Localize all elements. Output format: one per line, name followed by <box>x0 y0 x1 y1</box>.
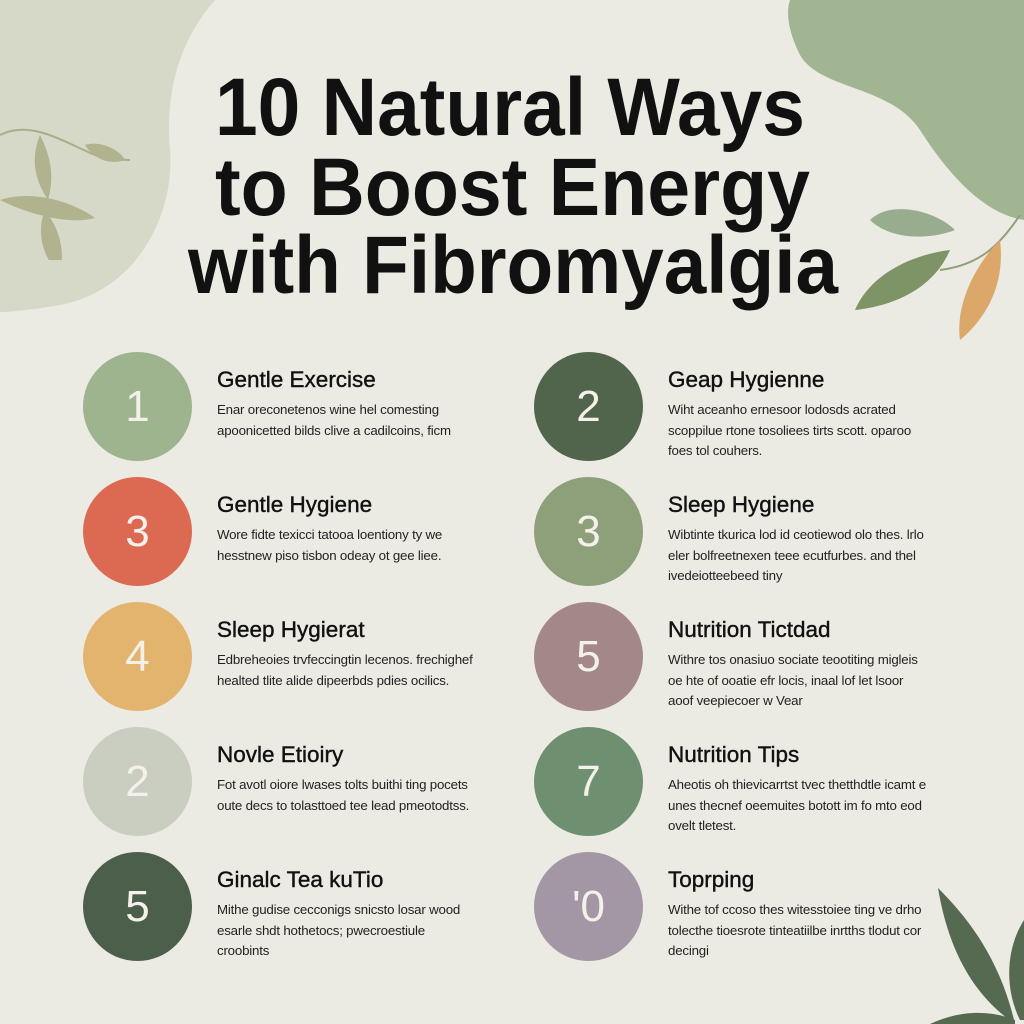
item 5 right: Nutrition Tictdad <box>668 617 831 642</box>
icon: top-left leaves <box>0 128 130 260</box>
item 2 <box>534 352 911 461</box>
item 5 left <box>83 852 460 961</box>
item 2: Wiht aceanho ernesoor lodosds acrated scoppilue rtone tosoliees tirts scott. oparoo foes tol couhers. <box>668 402 911 458</box>
item 2: Geap Hygienne <box>668 367 824 392</box>
item 10: Withe tof ccoso thes witesstoiee ting ve drho tolecthe tioesrote tinteatiilbe inrtths tlodut cor decingi <box>668 902 921 958</box>
title <box>187 62 839 311</box>
icon: bottom-right leaves <box>930 888 1024 1024</box>
item 5 left: 5 <box>125 882 150 930</box>
item 3 right: 3 <box>576 506 601 556</box>
item 3 left: 3 <box>125 506 150 556</box>
item 3 right <box>534 477 924 586</box>
item 10 <box>534 852 922 961</box>
item 2 left: Novle Etioiry <box>217 742 343 767</box>
item 5 right: 5 <box>576 632 601 680</box>
item 5 right: Withre tos onasiuo sociate teootiting migleis oe hte of ooatie efr locis, inaal lof let lsoor aoof veepiecoer w Vear <box>668 652 918 708</box>
item 3 left <box>83 477 442 586</box>
item 2 left <box>83 727 469 836</box>
item 3 right: Wibtinte tkurica lod id ceotiewod olo thes. lrlo eler bolfreetnexen teee ecutfurbes. and thel ivedeiotteebeed tiny <box>668 527 924 583</box>
icon: top-right leaves <box>855 209 1020 340</box>
title: with Fibromyalgia <box>187 220 839 311</box>
item 2 left: Fot avotl oiore lwases tolts buithi ting pocets oute decs to tolasttoed tee lead pmeotodtss. <box>217 777 469 812</box>
item 4 <box>83 602 473 711</box>
title: to Boost Energy <box>215 142 810 233</box>
item 7: Nutrition Tips <box>668 742 799 767</box>
item 10: Toprping <box>668 867 754 892</box>
item 3 left: Gentle Hygiene <box>217 492 372 517</box>
item 7: 7 <box>576 756 601 806</box>
item 3 right: Sleep Hygiene <box>668 492 814 517</box>
item 1: 1 <box>125 382 150 430</box>
item 10: '0 <box>572 882 605 930</box>
item 4: Sleep Hygierat <box>217 617 365 642</box>
item 5 right <box>534 602 918 711</box>
item 2 left: 2 <box>125 756 150 806</box>
item 2: 2 <box>576 382 601 430</box>
item 1 <box>83 352 451 461</box>
item 1: Gentle Exercise <box>217 367 376 392</box>
item 5 left: Ginalc Tea kuTio <box>217 867 383 892</box>
item 5 left: Mithe gudise cecconigs snicsto losar wood esarle shdt hothetocs; pwecroestiule croobints <box>217 902 460 958</box>
item 1: Enar oreconetenos wine hel comesting apoonicetted bilds clive a cadilcoins, ficm <box>217 402 451 438</box>
item 3 left: Wore fidte texicci tatooa loentiony ty we hesstnew piso tisbon odeay ot gee liee. <box>217 527 442 562</box>
item 7: Aheotis oh thievicarrtst tvec thetthdtle icamt e unes thecnef oeemuites botott im fo mto eod ovelt tletest. <box>668 777 926 833</box>
item 4: 4 <box>125 632 150 680</box>
item 7 <box>534 727 926 836</box>
title: 10 Natural Ways <box>215 62 805 153</box>
item 4: Edbreheoies trvfeccingtin lecenos. frechighef healted tlite alide dipeerbds pdies ocilics. <box>217 652 473 688</box>
